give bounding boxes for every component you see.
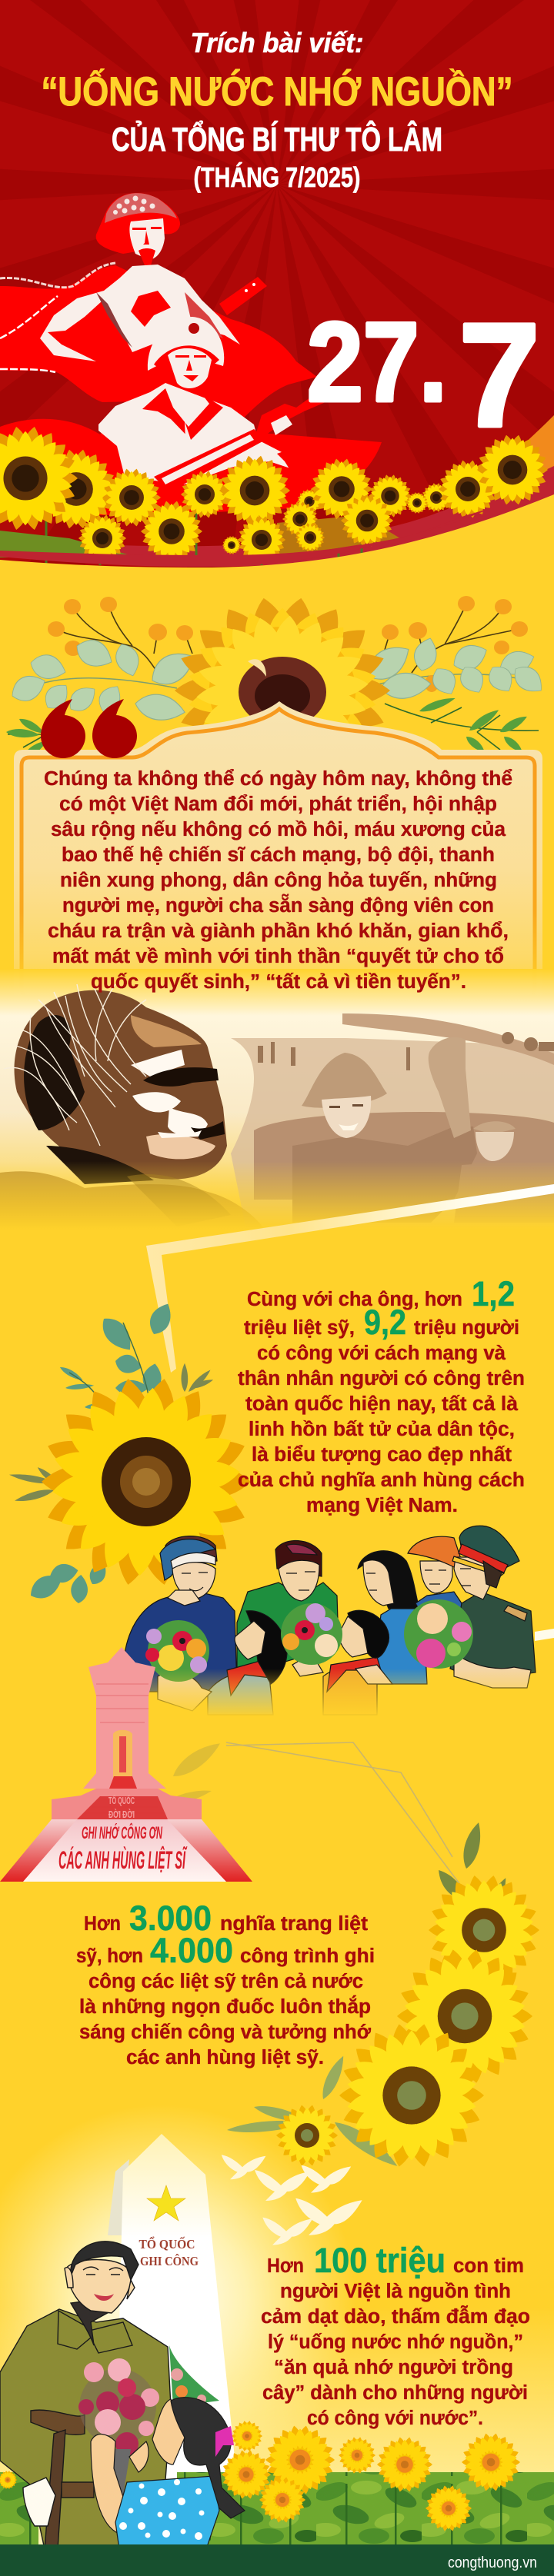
curved crimson band: [0, 466, 554, 567]
statistic text: 3,000 cemeteries: sáng chiến công và tưởng nhớ: [79, 2022, 372, 2043]
footer brand: congthuong.vn: [448, 2554, 537, 2571]
green fronds: [6, 694, 529, 760]
fade to background: [115, 1669, 554, 1718]
panel gold frame: [22, 709, 535, 997]
title: author line: CỦA TỔNG BÍ THƯ TÔ LÂM: [112, 119, 442, 158]
yellow body edge: [0, 494, 554, 584]
memorial gate monument: GHI NHỚ CÔNG ƠN: [82, 1823, 163, 1842]
memorial gate monument: CÁC ANH HÙNG LIỆT SĨ: [58, 1846, 188, 1874]
foliage bed: [177, 2472, 554, 2544]
veteran figure: [0, 2242, 171, 2549]
title: date line: (THÁNG 7/2025): [194, 161, 360, 193]
header panel: [0, 0, 554, 567]
portrait band: veteran mother and soldier: [0, 969, 554, 1230]
front soldier helmet and face: [148, 317, 224, 371]
statistic text: 1.2 million martyrs: có công với cách mạng và: [257, 1343, 506, 1364]
statistic text: 100 million hearts: con tim: [453, 2255, 524, 2277]
thin decorative frame: [226, 1742, 477, 1907]
quote text: niên xung phong, dân công hỏa tuyến, những: [60, 870, 497, 891]
statistic text: 100 million hearts: có công với nước”.: [307, 2408, 483, 2429]
floral crown above the quote: [6, 596, 542, 750]
curved orange band: [431, 415, 554, 523]
memorial gate monument: ĐỜI ĐỜI: [108, 1809, 135, 1820]
memorial obelisk: [108, 2134, 237, 2480]
statistic text: 3,000 cemeteries: 3.000: [129, 1899, 212, 1938]
bouquets: [145, 1599, 473, 1682]
boy in orange helmet: [416, 1591, 462, 1607]
statistic text: 3,000 cemeteries: công các liệt sỹ trên cả nước: [88, 1971, 363, 1992]
statistic text: 100 million hearts: Hơn: [267, 2255, 304, 2277]
title: excerpt line: Trích bài viết:: [191, 27, 363, 58]
statistic text: 100 million hearts: cây” dành cho những người: [262, 2382, 528, 2404]
date 27.7: 27.: [307, 299, 447, 424]
statistic text: 100 million hearts: 100 triệu: [314, 2241, 446, 2280]
statistic text: 1.2 million martyrs: là biểu tượng cao đẹp nhất: [252, 1444, 512, 1466]
bottom fade: [0, 1161, 554, 1230]
star: [147, 2185, 185, 2221]
quote text: mất mát về mình với tinh thần “quyết tử cho tổ: [52, 946, 504, 967]
monument base: [52, 1789, 202, 1819]
statistic text: 100 million hearts: lý “uống nước nhớ nguồn,”: [268, 2331, 523, 2353]
statistic text: 3,000 cemeteries: Hơn: [84, 1913, 121, 1935]
statistic text: 1.2 million martyrs: triệu người: [414, 1317, 519, 1339]
rear soldier helmet: [96, 193, 180, 254]
monument steps road: [0, 1819, 252, 1882]
memorial gate monument: TỔ QUỐC: [108, 1795, 135, 1806]
memorial gate monument: [0, 1647, 252, 1882]
red ray background: [0, 0, 554, 567]
statistic text: 100 million hearts: [261, 2241, 530, 2429]
white angled frame line: [146, 1184, 554, 1641]
statistic text: 100 million hearts: người Việt là nguồn tình: [280, 2281, 511, 2302]
statistic text: 3,000 cemeteries: nghĩa trang liệt: [220, 1913, 369, 1935]
faded leaves: [165, 1737, 224, 1807]
sunflower with leaves: [0, 1300, 312, 1648]
quote text: [44, 768, 512, 993]
quote text: sâu rộng nếu không có mồ hôi, máu xương của: [51, 819, 506, 840]
front soldier shirt: [98, 383, 297, 484]
icon: quotation marks: [41, 699, 137, 758]
woman in blue shirt: [377, 1609, 428, 1685]
statistic text: 1.2 million martyrs: thân nhân người có công trên: [238, 1368, 525, 1390]
bouquet: [78, 2358, 159, 2495]
sepia soldier photo: [231, 1013, 554, 1230]
orange berries: [48, 596, 528, 692]
front soldier rifle: [254, 388, 331, 440]
statistic text: 3,000 cemeteries: sỹ, hơn: [76, 1945, 143, 1967]
boy with red scarf: [323, 1666, 377, 1715]
statistic text: 100 million hearts: “ăn quả nhớ người trồng: [274, 2357, 513, 2378]
sunflower row: [0, 395, 554, 580]
quote text: Chúng ta không thể có ngày hôm nay, không thể: [44, 768, 512, 790]
field sunflowers: [0, 2405, 537, 2545]
statistic text: 3,000 cemeteries: công trình ghi: [240, 1945, 375, 1967]
rear soldier body: [40, 265, 240, 361]
rear soldier flag outline: [0, 263, 115, 288]
branches: [56, 604, 519, 673]
quote text: cháu ra trận và giành phần khó khăn, gian khổ,: [48, 920, 509, 942]
statistic text: 1.2 million martyrs: của chủ nghĩa anh hùng cách: [238, 1469, 525, 1491]
child figure: [91, 2398, 245, 2549]
statistic text: 3,000 cemeteries: là những ngọn đuốc luôn thắp: [79, 1995, 371, 2018]
grandmother: [125, 1590, 237, 1692]
background glow: [0, 2112, 349, 2455]
rear soldier face: [129, 218, 165, 260]
quote panel: [14, 699, 542, 1003]
statistic text: 1.2 million martyrs: Cùng với cha ông, hơn: [247, 1289, 462, 1310]
panel background: [14, 701, 542, 1003]
illustration: family group with bouquets: [115, 1526, 554, 1718]
memorial obelisk: GHI CÔNG: [140, 2254, 199, 2268]
rear rifle: [219, 277, 267, 315]
statistic text: 3,000 cemeteries: [76, 1899, 375, 2068]
statistic text: 1.2 million martyrs: mạng Việt Nam.: [306, 1495, 458, 1516]
quote text: quốc quyết sinh,” “tất cả vì tiền tuyến”.: [91, 971, 466, 993]
leaves above: [58, 1300, 176, 1409]
doves: [222, 2155, 362, 2245]
statistic text: 1.2 million martyrs: linh hồn bất tử của dân tộc,: [249, 1419, 515, 1440]
footer bar: [0, 2544, 554, 2576]
statistic text: 1.2 million martyrs: toàn quốc hiện nay, tất cả là: [245, 1393, 519, 1415]
illustration: soldiers with red flag: [0, 193, 382, 515]
statistic text: 100 million hearts: cảm dạt dào, thấm đẫm đạo: [261, 2305, 530, 2328]
date 27.7: 7: [459, 292, 540, 458]
statistic text: 1.2 million martyrs: 1,2: [472, 1274, 515, 1313]
statistic text: 3,000 cemeteries: các anh hùng liệt sỹ.: [126, 2047, 324, 2068]
date 27.7: [307, 292, 540, 458]
quote text: người mẹ, người cha sẵn sàng động viên con: [62, 894, 494, 917]
sunflower cluster: [226, 1821, 554, 2210]
statistic text: 1.2 million martyrs: triệu liệt sỹ,: [244, 1317, 355, 1339]
large sunflower: [175, 598, 390, 726]
hands and arms: [158, 1672, 212, 1711]
quote text: bao thế hệ chiến sĩ cách mạng, bộ đội, thanh: [62, 844, 495, 866]
officer: [450, 1592, 536, 1680]
memorial obelisk: TỔ QUỐC: [138, 2236, 195, 2252]
lower leaves: [25, 1559, 111, 1604]
quote text: có một Việt Nam đổi mới, phát triển, hội nhập: [59, 794, 497, 815]
old woman portrait: [0, 984, 265, 1230]
statistic text: 1.2 million martyrs: [238, 1274, 525, 1516]
statistic text: 1.2 million martyrs: 9,2: [364, 1303, 406, 1342]
man in green shirt: [237, 1583, 339, 1676]
lower curved band over flowers: [0, 508, 492, 567]
lower scene: veteran and child at memorial: [0, 2076, 554, 2549]
monument gate: [83, 1647, 166, 1789]
sage leaves: [7, 634, 549, 724]
portrait background: [0, 969, 554, 1230]
statistic text: 3,000 cemeteries: 4.000: [150, 1931, 233, 1970]
wreath flowers: [169, 2345, 219, 2407]
girl with red scarf: [208, 1672, 273, 1715]
